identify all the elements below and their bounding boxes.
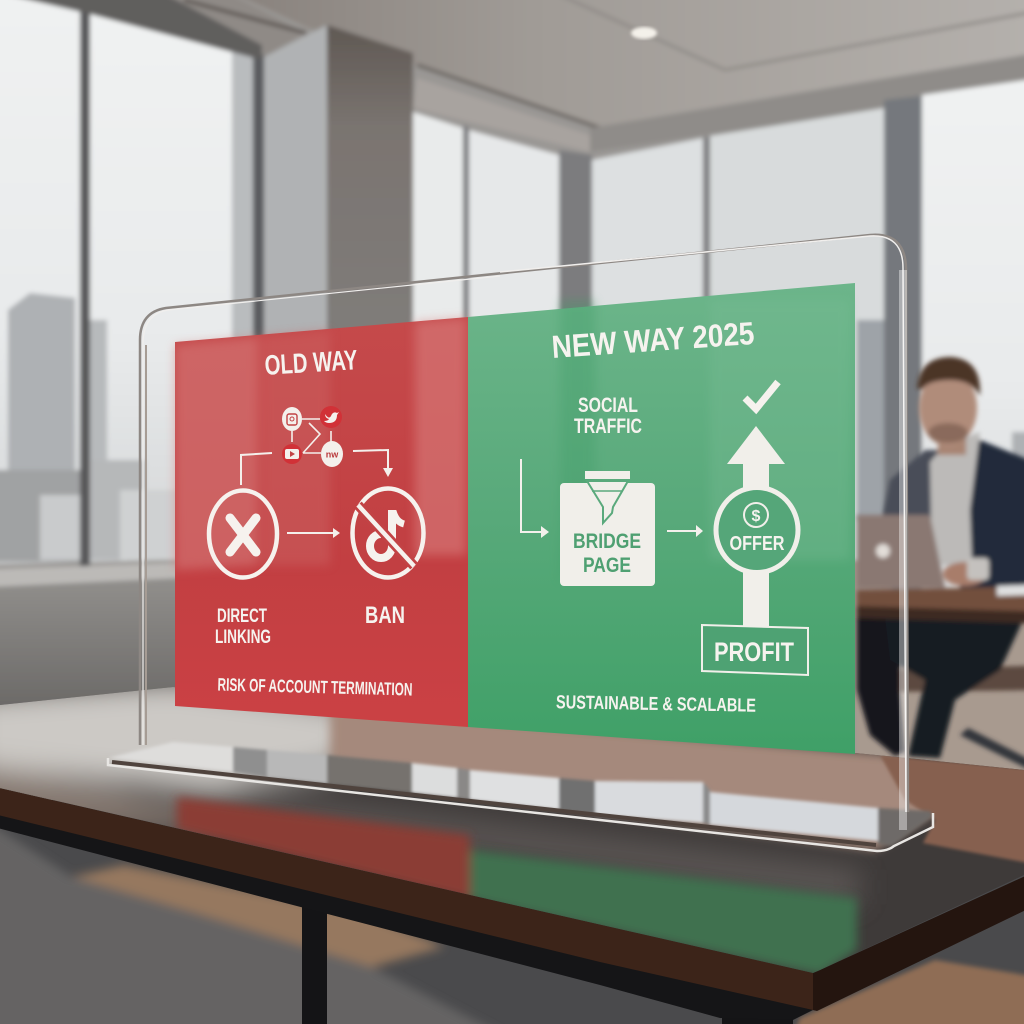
label: direct linking: [215, 606, 271, 648]
centre windows: [413, 112, 463, 565]
icon: funnel: [585, 471, 630, 523]
profit box: [702, 625, 808, 675]
ceiling: [120, 0, 306, 57]
icon: twitter bird: [320, 406, 342, 428]
heading: new way 2025: NEW WAY 2025: [550, 315, 756, 365]
acrylic sheet edge: [140, 235, 908, 812]
desk: [857, 586, 1024, 622]
person at desk: [857, 357, 1024, 782]
jacket right: [960, 438, 1024, 590]
arrow: cluster to direct linking: [241, 453, 272, 485]
caption: sustainable and scalable: SUSTAINABLE & SCALABLE: [556, 692, 756, 717]
table legs: [302, 905, 327, 1024]
acrylic right edge band: [899, 270, 907, 830]
arrow: bridge page to offer: [667, 525, 703, 537]
icon: dollar coin: $: [752, 508, 761, 525]
acrylic stand: [108, 235, 933, 851]
table under rail: [0, 810, 817, 1020]
ceiling light: [631, 27, 657, 39]
growth arrow: [727, 426, 785, 628]
label: direct linking: LINKING: [215, 627, 271, 648]
floor below table: [0, 800, 1024, 1024]
table surface: [0, 680, 1024, 980]
offer circle: OFFER: [730, 533, 785, 555]
acrylic base reflections: [108, 742, 933, 846]
left windows: [0, 0, 80, 565]
arrow: direct linking to ban: [287, 528, 340, 538]
table: [0, 680, 1024, 1024]
panel: new way: [468, 283, 855, 754]
icon: network badge: nw: [326, 450, 339, 460]
column: [264, 25, 327, 590]
bridge page card: BRIDGE: [573, 530, 641, 553]
floor behind table: [855, 620, 1024, 800]
label: ban: BAN: [365, 602, 405, 629]
arrow: cluster to ban: [353, 450, 393, 477]
icon: ban tiktok: [352, 488, 424, 578]
jacket left sleeve: [883, 450, 940, 520]
icon: youtube: [282, 444, 302, 464]
red background: [175, 317, 468, 727]
caption: risk of account termination: RISK OF ACCOUNT TERMINATION: [217, 674, 413, 700]
sill and wall: [0, 560, 264, 590]
arrow: social traffic to bridge page: [521, 459, 549, 538]
label: social traffic: SOCIAL: [578, 394, 638, 417]
left window skyline: [8, 293, 75, 560]
bridge page card: [560, 471, 655, 586]
label: social traffic: TRAFFIC: [574, 415, 642, 438]
icon: instagram: [282, 407, 302, 431]
profit box: PROFIT: [714, 637, 794, 667]
label: direct linking: DIRECT: [217, 606, 267, 627]
panel: old way: [175, 317, 468, 727]
neck and head: [938, 425, 966, 455]
person legs: [857, 618, 905, 756]
chair: [883, 665, 1024, 692]
offer circle: [716, 488, 798, 572]
icon: check mark: [745, 382, 778, 409]
acrylic base front edge: [108, 758, 933, 851]
laptop: [857, 515, 945, 588]
table front edge: [0, 786, 1024, 1011]
right windows: [592, 138, 703, 565]
green background: [468, 283, 855, 754]
label: social traffic: [574, 394, 642, 438]
hand and cuff: [943, 562, 987, 586]
icon: social network cluster: [282, 406, 343, 467]
heading: old way: OLD WAY: [264, 344, 359, 381]
shirt: [930, 432, 980, 565]
bridge page card: PAGE: [583, 554, 631, 577]
icon: direct linking x: [209, 490, 277, 578]
